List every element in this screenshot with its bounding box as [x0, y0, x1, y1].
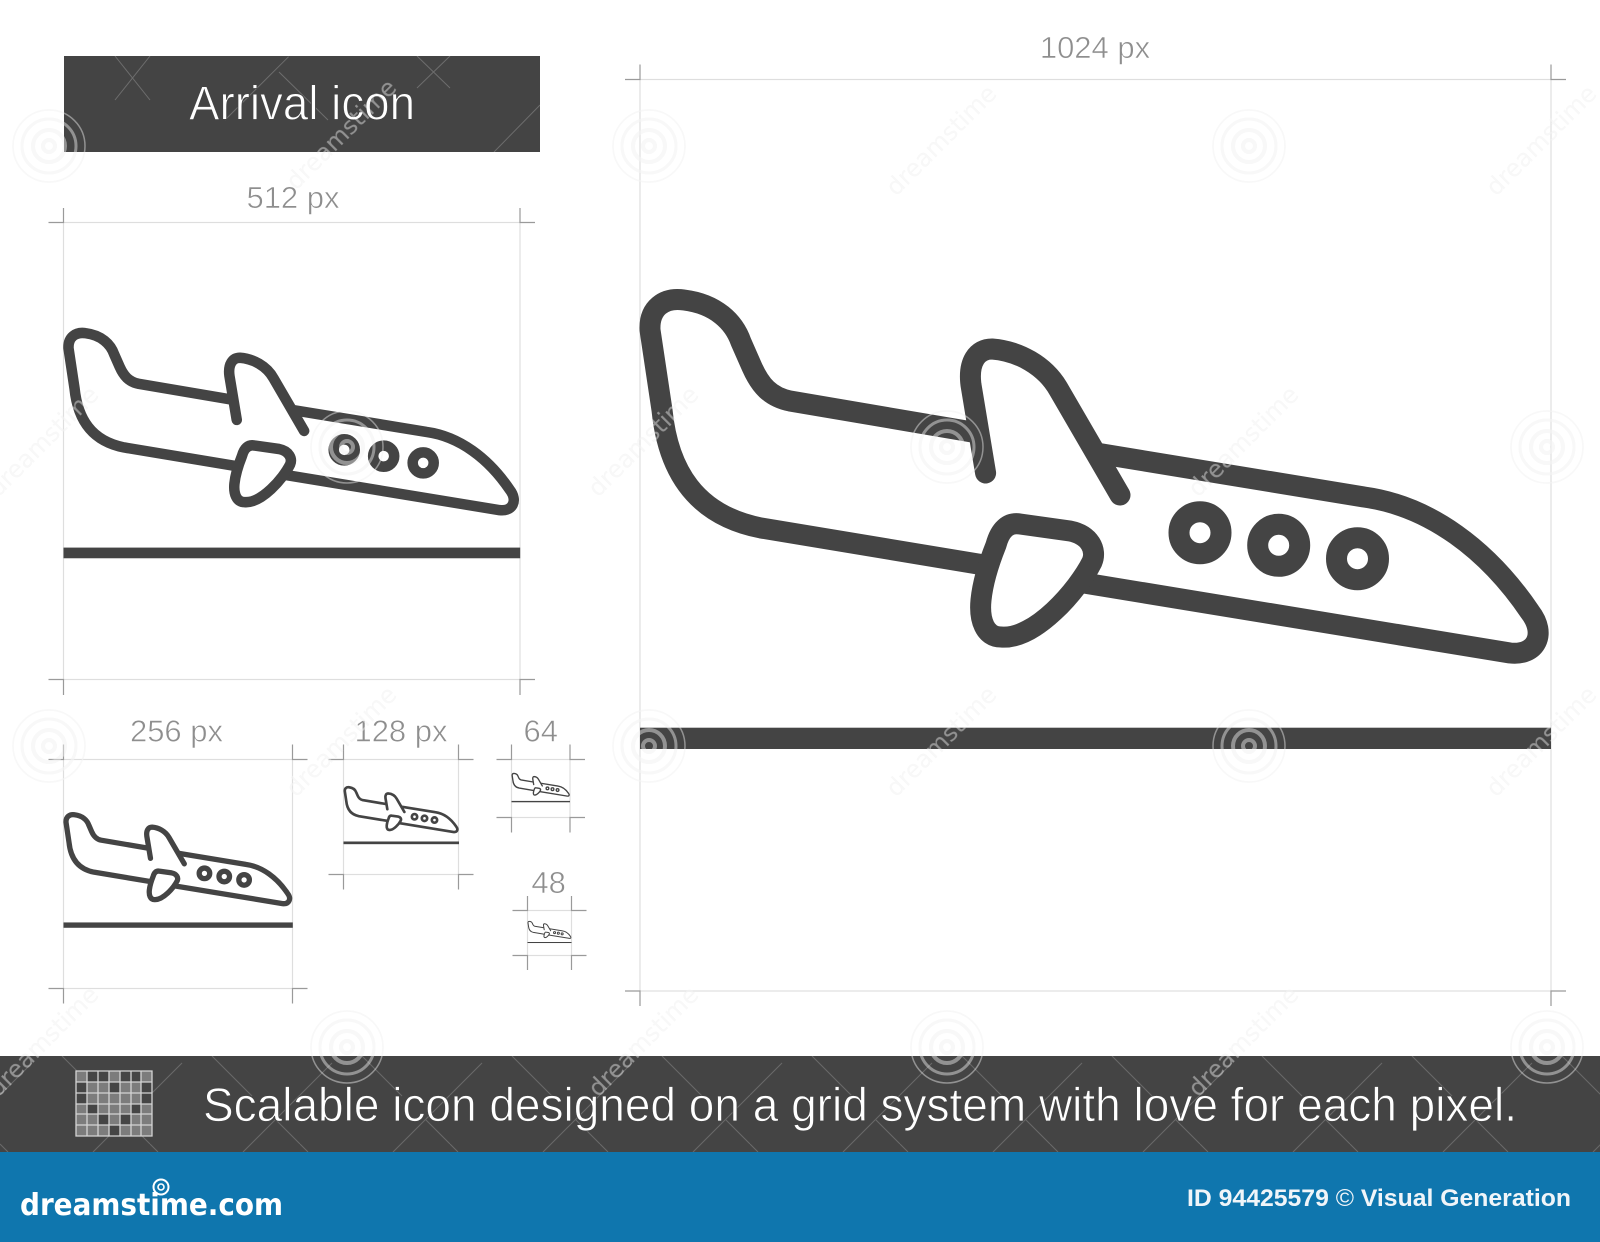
- size label: 64: 64: [523, 714, 558, 749]
- size label: 1024 px: 1024 px: [1040, 30, 1151, 65]
- title banner: [64, 56, 540, 152]
- size label: 512 px: 512 px: [246, 180, 340, 215]
- size guide frame: 512: [48, 208, 535, 695]
- icon: plane 48: [528, 921, 572, 943]
- size guide frame: 64: [496, 744, 585, 832]
- icon: plane 512: [64, 333, 520, 558]
- size guide frame: 128: [328, 744, 474, 890]
- size label: 128 px: 128 px: [354, 714, 448, 749]
- icon: pixel grid: [76, 1071, 152, 1136]
- size label: 48: 48: [531, 865, 566, 900]
- image id and credit: ID 94425579 © Visual Generation: [1187, 1185, 1571, 1212]
- icon: plane 1024: [640, 300, 1551, 749]
- icon: plane 128: [344, 787, 459, 844]
- dreamstime logo: dreamstime.com: [20, 1188, 283, 1223]
- icon: plane 64: [512, 773, 570, 802]
- size label: 256 px: 256 px: [130, 714, 224, 749]
- banner text: Scalable icon designed on a grid system with love for each pixel.: [203, 1078, 1517, 1131]
- bottom banner: [0, 1056, 1600, 1152]
- size guide frame: 256: [48, 744, 308, 1004]
- icon: plane 256: [64, 815, 293, 928]
- title text: Arrival icon: [189, 78, 415, 130]
- footer bar: [0, 1152, 1600, 1242]
- size guide frame: 48: [512, 896, 586, 970]
- size guide frame: 1024: [625, 64, 1566, 1006]
